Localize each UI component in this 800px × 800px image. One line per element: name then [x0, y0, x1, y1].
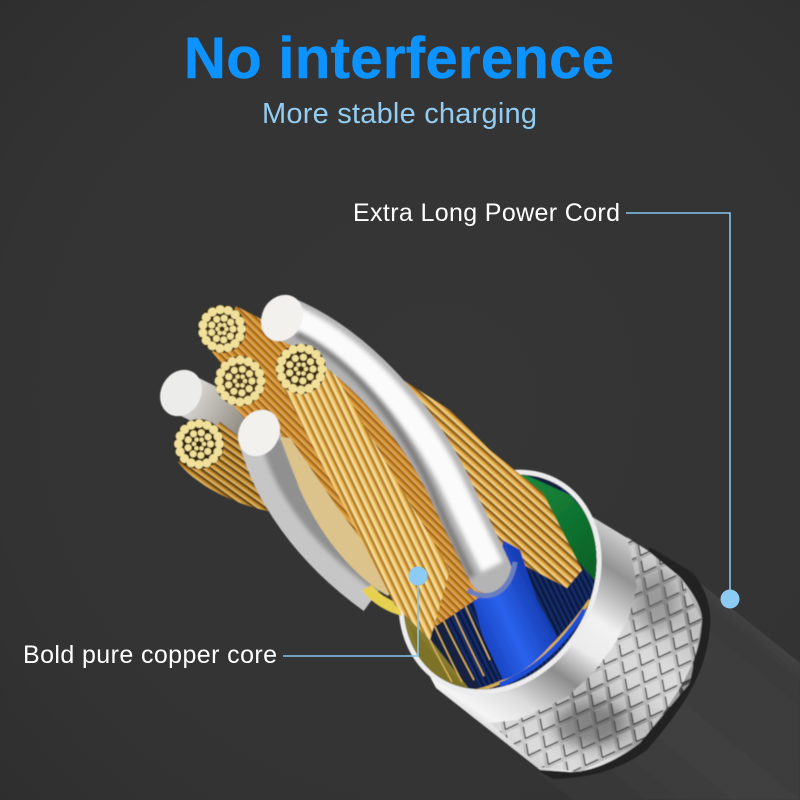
copper strand end: lower left [174, 419, 224, 469]
wire tip sleeve [468, 562, 515, 596]
title: No interference [184, 26, 614, 91]
yellow conductor clip [362, 585, 402, 616]
label: Bold pure copper core [23, 641, 277, 669]
copper bundle: lower left [178, 422, 310, 512]
green wire [520, 474, 597, 580]
blue insulated wire [453, 540, 557, 680]
gold strands in cavity [428, 606, 492, 683]
front blue lining [500, 610, 585, 685]
leader line [283, 577, 418, 656]
leader dot [408, 566, 428, 586]
silver wire: front [230, 402, 384, 594]
metal ferrule [430, 516, 710, 779]
dark end ring of ferrule [537, 547, 710, 779]
copper strand end: middle [215, 356, 265, 406]
label: Extra Long Power Cord [353, 199, 620, 227]
olive inner wall [404, 614, 469, 688]
cable illustration [152, 287, 800, 800]
copper bundle: middle [225, 360, 430, 600]
dark blue strands [446, 488, 596, 690]
leader line [626, 213, 730, 598]
cable opening [398, 468, 602, 692]
knurled grip pattern [491, 536, 702, 772]
copper bundle: right-front strands [281, 352, 450, 640]
ferrule body [400, 470, 702, 772]
callout: extra long power cord [353, 199, 740, 608]
copper strand end: right [276, 344, 326, 394]
subtitle: More stable charging [262, 98, 537, 130]
copper strand end: top left [198, 305, 246, 353]
right gold bundle [375, 362, 582, 588]
copper bundle: top left [212, 306, 490, 630]
knurl shadow [554, 703, 626, 747]
silver wire: main curved [253, 287, 515, 596]
pale gold ribbon [280, 437, 395, 596]
rim [358, 432, 642, 732]
callout: bold pure copper core [23, 566, 428, 669]
gold front edge [470, 600, 590, 692]
leader dot [720, 590, 740, 608]
cavity [365, 439, 635, 725]
black cable jacket [537, 583, 800, 800]
silver wire: back left [152, 362, 260, 432]
